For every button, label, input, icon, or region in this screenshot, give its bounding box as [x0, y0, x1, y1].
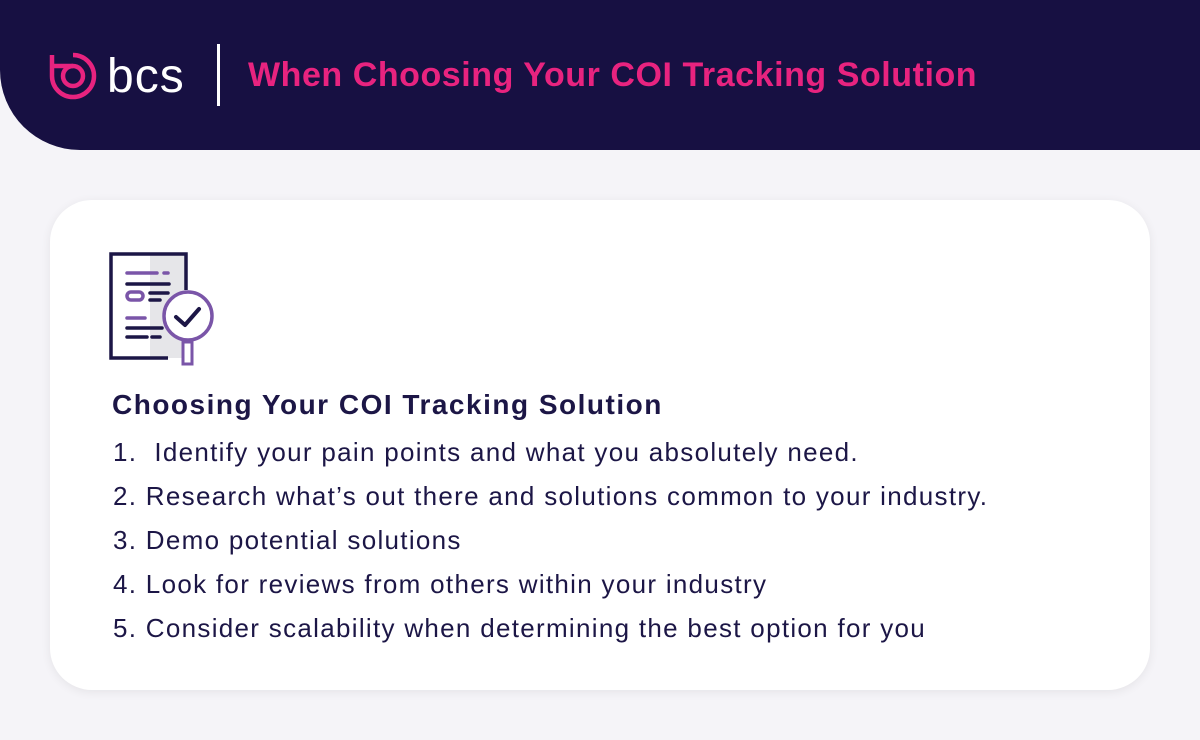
heading: Choosing Your COI Tracking Solution: [112, 389, 663, 420]
list items: 5. Consider scalability when determining the best option for you: [113, 613, 926, 643]
panel: card: [50, 200, 1150, 690]
icon: document with magnifier: [109, 252, 214, 366]
icon: bcs logo mark: [52, 55, 94, 97]
title: When Choosing Your COI Tracking Solution: [248, 56, 977, 94]
list items: 2. Research what’s out there and solutions common to your industry.: [113, 481, 988, 511]
logo: [50, 52, 185, 100]
list items: 1. Identify your pain points and what you absolutely need.: [113, 437, 859, 467]
list items: 4. Look for reviews from others within your industry: [113, 569, 767, 599]
header bar: [0, 0, 1200, 150]
list items: [113, 437, 988, 643]
list items: 3. Demo potential solutions: [113, 525, 462, 555]
